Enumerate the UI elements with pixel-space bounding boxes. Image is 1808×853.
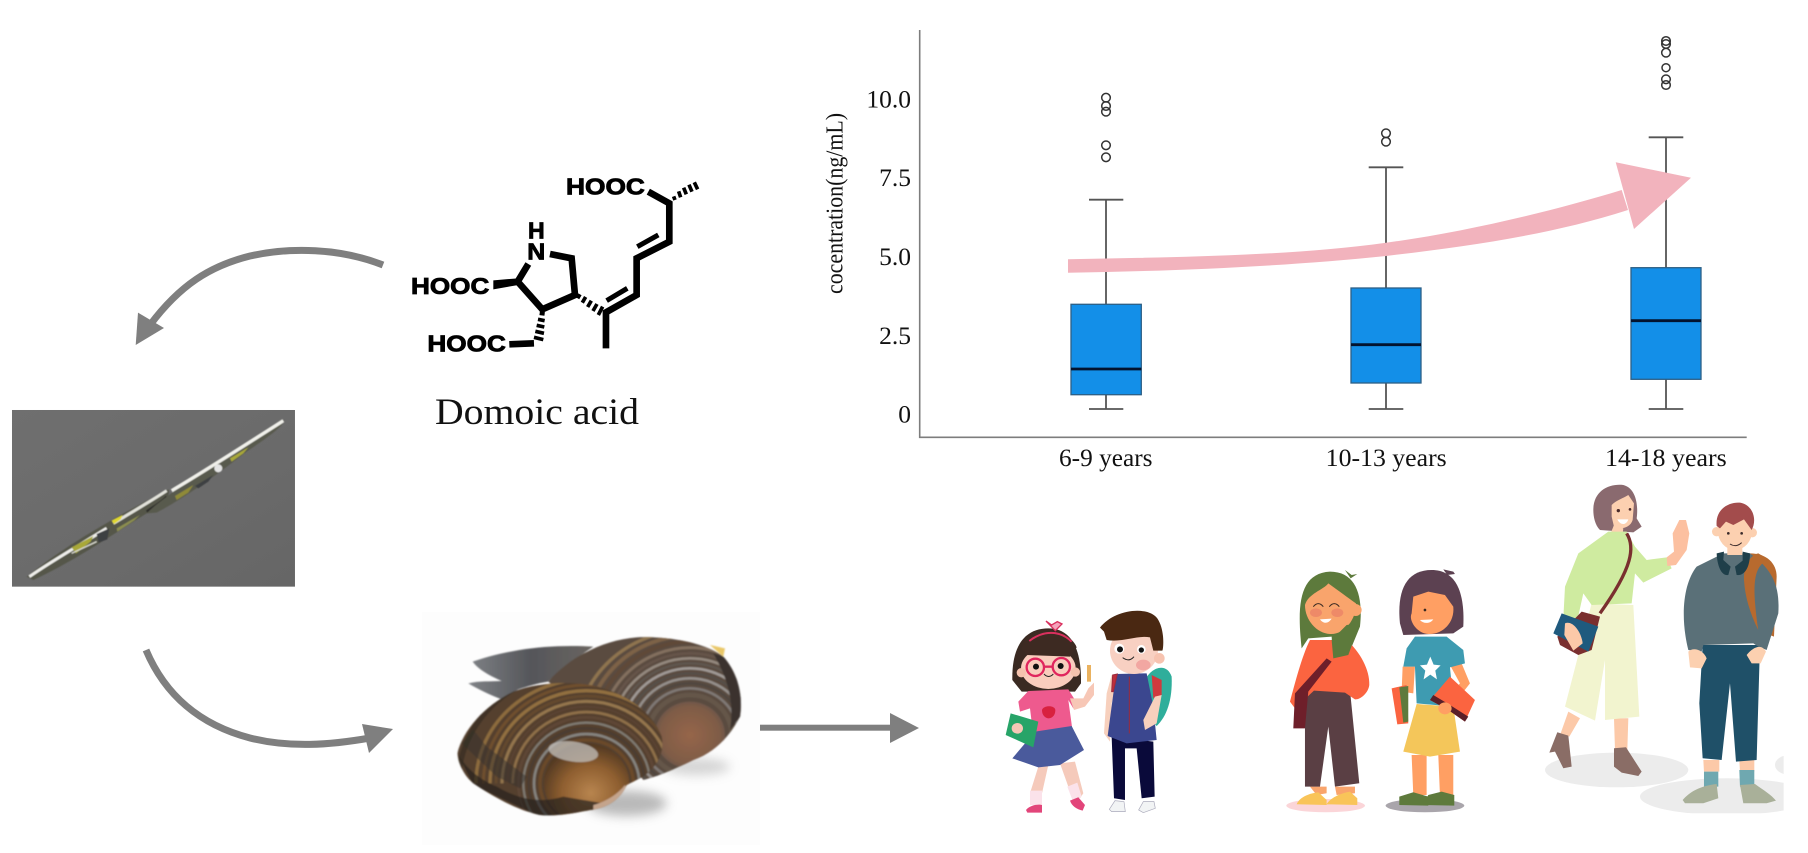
boy with backpack [1100, 611, 1172, 813]
illustration: children 10-13 years [1286, 569, 1475, 812]
x axis labels [1059, 443, 1727, 472]
arrow: mussels to children [760, 713, 919, 743]
mussel: back shell [548, 636, 742, 781]
molecule: domoic acid structure: N [527, 238, 545, 264]
ground shadows [1545, 752, 1784, 814]
molecule: domoic acid structure [411, 173, 698, 357]
teen boy with backpack [1683, 503, 1779, 803]
box: 6-9 years [1071, 93, 1141, 409]
x axis labels: 6-9 years [1059, 443, 1152, 472]
illustration: teenagers 14-18 years [1545, 485, 1808, 815]
teen girl waving [1549, 485, 1689, 776]
box: 14-18 years [1631, 37, 1701, 409]
y axis title: cocentration(ng/mL) [822, 113, 848, 294]
girl with green hair [1286, 570, 1369, 812]
x axis labels: 14-18 years [1605, 443, 1727, 472]
y axis tick labels: 0 [898, 400, 911, 429]
molecule: domoic acid structure: H [528, 217, 545, 243]
arrow: diatom to mussels [146, 650, 393, 753]
girl with star t-shirt [1386, 569, 1475, 812]
y axis tick labels: 7.5 [879, 163, 911, 192]
chart axes [920, 30, 1747, 437]
box: 10-13 years [1351, 129, 1421, 409]
y axis tick labels [866, 84, 911, 429]
molecule: domoic acid structure: HOOC [566, 173, 645, 199]
molecule: domoic acid structure: HOOC [427, 331, 506, 357]
x axis labels: 10-13 years [1326, 443, 1447, 472]
photo: pseudo-nitzschia diatom [12, 410, 295, 587]
molecule: domoic acid structure: HOOC [411, 273, 489, 299]
molecule name label: Domoic acid [435, 392, 640, 433]
y axis tick labels: 5.0 [879, 242, 911, 271]
photo: mussels [456, 636, 742, 823]
y axis tick labels: 2.5 [879, 321, 911, 350]
box plot chart [822, 30, 1747, 472]
y axis tick labels: 10.0 [866, 84, 911, 113]
diatom cell, lower [27, 489, 169, 580]
diatom cell, upper [147, 419, 284, 513]
arrow: domoic acid to diatom [136, 250, 383, 345]
trend arrow [1068, 162, 1691, 273]
mussel: rear open shell [468, 646, 593, 699]
girl with glasses [1006, 621, 1094, 813]
mussel: front shell [456, 682, 663, 817]
illustration: children 6-9 years [1006, 611, 1172, 813]
